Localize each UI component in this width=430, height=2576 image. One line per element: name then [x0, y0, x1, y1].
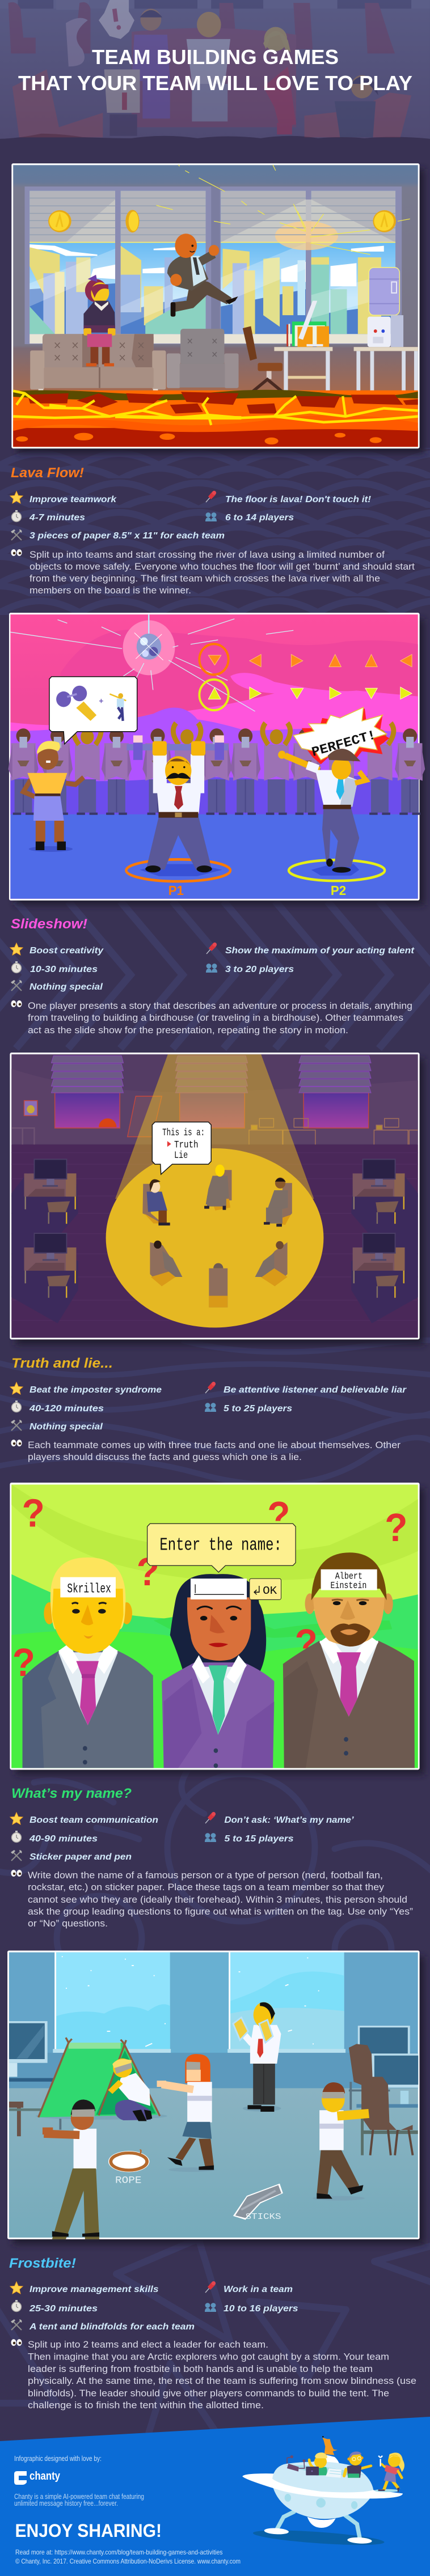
- desks: [24, 1159, 404, 1298]
- text: description: [29, 550, 415, 596]
- background pattern: slideshow chevrons: [0, 901, 430, 1049]
- jumping man: [167, 234, 238, 317]
- chanty description: Chanty is a simple AI-powered team chat featuring: [14, 2492, 144, 2501]
- back desks: [249, 1118, 418, 1144]
- text: description: Split up into 2 teams and elect a leader for each team.: [28, 2340, 268, 2350]
- text: description: leader is suffering from frostbite in both hands and is unable to help the team: [28, 2364, 373, 2374]
- heading: Lava Flow!: Lava Flow!: [11, 465, 84, 481]
- text: duration: 40-120 minutes: [29, 1404, 104, 1414]
- question marks: [12, 1492, 407, 1685]
- panel: lava flow illustration: [11, 163, 420, 448]
- spotlight: [106, 1054, 323, 1327]
- source and license: [15, 2548, 241, 2565]
- speech bubble: truth or lie: This is a:: [162, 1128, 205, 1139]
- heading: What's my name?: What’s my name?: [11, 1786, 132, 1801]
- text: description: Split up into teams and start crossing the river of lava using a limited number of: [29, 550, 385, 560]
- text: players: 3 to 20 players: [225, 965, 294, 974]
- credit line: Infographic designed with love by:: [14, 2454, 102, 2463]
- background pattern: lava section waves: [0, 448, 430, 615]
- panel: frostbite illustration: [7, 1951, 420, 2239]
- icon: eyes: [11, 1870, 22, 1877]
- floor shadows: [11, 1173, 418, 1323]
- background pattern: truth section wavy lines: [0, 1340, 430, 1484]
- text: players: 10 to 16 players: [224, 2304, 298, 2314]
- blindfolded man left: [43, 2099, 99, 2239]
- text: materials: A tent and blindfolds for each team: [29, 2322, 195, 2332]
- question marks: ?: [385, 1506, 407, 1550]
- icon: eyes: [11, 1000, 22, 1007]
- coins: [48, 210, 396, 232]
- text: rule: Show the maximum of your acting talent: [225, 946, 415, 956]
- kneeling teammate: [110, 2059, 152, 2121]
- icon: star: [10, 1382, 23, 1394]
- seated players: [142, 1165, 292, 1308]
- icon: players: [206, 964, 217, 973]
- text: materials: Nothing special: [29, 1422, 103, 1432]
- icon: eyes: [11, 1440, 22, 1446]
- panel shadows: [13, 169, 424, 2244]
- text: rule: Work in a team: [224, 2285, 293, 2294]
- icon: pin: [205, 1382, 216, 1393]
- icon: pin: [205, 1812, 216, 1823]
- right person: Einstein: [330, 1580, 366, 1591]
- right monitors: [356, 2026, 418, 2108]
- source and license: © Chanty, Inc. 2017. Creative Commons Attribution-NoDerivs License. www.chanty.com: [15, 2557, 241, 2565]
- dog: [322, 2436, 338, 2455]
- office chair: [243, 326, 283, 392]
- text: materials: 3 pieces of paper 8.5" x 11" for each team: [29, 531, 225, 541]
- name prompt bubble: [147, 1523, 296, 1572]
- text: description: rockstar, etc.) on sticker paper. Place these tags on a team member so that they: [28, 1882, 385, 1892]
- left person: Skrillex: [67, 1581, 111, 1597]
- text: duration: 40-90 minutes: [29, 1834, 98, 1844]
- heading: Truth and lie...: Truth and lie...: [11, 1356, 113, 1371]
- icon: star: [10, 1813, 23, 1824]
- icon: eyes: [11, 2339, 22, 2346]
- text: rule: The floor is lava! Don't touch it!: [225, 495, 372, 504]
- text: description: challenge is to finish the tent within the allotted time.: [28, 2400, 264, 2411]
- player labels: [168, 883, 346, 898]
- text: description: [28, 2340, 416, 2411]
- player labels: P2: [331, 883, 346, 898]
- text: description: objects to move safely. Everyone who touches the floor will get ‘burnt’ and should start: [29, 562, 415, 572]
- right person: Albert: [335, 1571, 362, 1582]
- icon: pin: [205, 2281, 216, 2293]
- middle person: [162, 1574, 281, 1768]
- sticks: [233, 2184, 283, 2219]
- text: description: Then imagine that you are Arctic explorers who got caught by a storm. Your team: [28, 2352, 389, 2362]
- icon: players: [205, 512, 217, 521]
- icon: pin: [206, 491, 216, 502]
- text: goal: Beat the imposter syndrome: [29, 1385, 162, 1395]
- chanty logo: chanty: [29, 2470, 61, 2482]
- lava floor: [13, 390, 418, 447]
- text: description: from the very beginning. The first team which crosses the lava river with all the: [29, 574, 380, 584]
- text: duration: 25-30 minutes: [29, 2304, 98, 2314]
- robot: [287, 2455, 306, 2472]
- chanty description: unlimited message history free...forever.: [14, 2499, 118, 2507]
- middle person: OK: [263, 1585, 277, 1597]
- footer: [0, 2417, 430, 2576]
- leader with frostbitten hands: [233, 2002, 281, 2112]
- paper stack: [326, 2468, 342, 2478]
- crew member with glasses: [344, 2451, 371, 2478]
- text: description: members on the board is the winner.: [29, 585, 191, 596]
- title: TEAM BUILDING GAMES: [92, 45, 339, 69]
- dancer with perfect burst: PERFECT!: [310, 728, 377, 760]
- title: THAT YOUR TEAM WILL LOVE TO PLAY: [18, 71, 412, 95]
- icon: tools: [11, 1420, 22, 1431]
- icon: pin: [206, 943, 217, 954]
- text: materials: Nothing special: [29, 982, 103, 992]
- icon: eyes: [11, 549, 22, 556]
- icon: players: [205, 2303, 216, 2312]
- text: description: [28, 1870, 413, 1929]
- text: description: ask the group leading questions to figure out what is written on the tag. Use only “Yes”: [28, 1907, 413, 1917]
- speech bubble: truth or lie: Lie: [174, 1151, 188, 1161]
- question marks: ?: [12, 1641, 35, 1685]
- icon: players: [205, 1833, 216, 1842]
- source and license: Read more at: https://www.chanty.com/blog/team-building-games-and-activities: [15, 2548, 222, 2556]
- icon: stopwatch: [11, 510, 22, 521]
- crew member with laptop: [306, 2452, 327, 2475]
- text: players: 5 to 15 players: [225, 1834, 294, 1844]
- panel: what's my name illustration: [10, 1483, 420, 1769]
- background pattern: name section circles: [0, 1771, 430, 1981]
- icon: star: [10, 491, 23, 503]
- right chairs: [349, 2044, 418, 2155]
- question marks: ?: [295, 1622, 318, 1665]
- right person: [283, 1552, 415, 1768]
- icon: stopwatch: [11, 1401, 22, 1412]
- text: rule: Don’t ask: ‘What’s my name’: [225, 1815, 354, 1825]
- text: description: act as the slide show for the presentation, repeating the story in motion.: [28, 1025, 348, 1036]
- text: description: cannot see who they are (ideally their forehead). Within 3 minutes, this person should: [28, 1895, 407, 1905]
- left computer desk: [9, 2021, 67, 2136]
- text: materials: Sticker paper and pen: [29, 1852, 132, 1862]
- icon: stopwatch: [11, 2300, 22, 2311]
- chanty description: [14, 2492, 144, 2507]
- text: duration: 10-30 minutes: [30, 965, 98, 974]
- text: players: 5 to 25 players: [224, 1404, 292, 1414]
- text: description: players should discuss the facts and guess which one is a lie.: [28, 1452, 302, 1462]
- text: goal: Improve management skills: [29, 2285, 159, 2294]
- question marks: ?: [137, 1550, 159, 1594]
- enjoy sharing: ENJOY SHARING!: [15, 2520, 162, 2541]
- rhythm arrows: [199, 644, 412, 710]
- icon: tools: [11, 529, 22, 540]
- icon: stopwatch: [11, 1831, 22, 1842]
- speech bubble: truth or lie: Truth: [174, 1140, 198, 1151]
- desk with monitor: [274, 301, 332, 394]
- speech bubble: [49, 677, 137, 744]
- text: description: physically. At the same time, the rest of the team is suffering from snow blindness (use: [28, 2376, 416, 2386]
- illustration: flying saucer with team: [242, 2436, 404, 2548]
- icon: players: [205, 1403, 216, 1412]
- text: description: or “No” questions.: [28, 1919, 108, 1929]
- text: description: from traveling to building a birdhouse (or traveling in a birdhouse). Other teammates: [28, 1013, 403, 1023]
- text: description: Each teammate comes up with three true facts and one lie about themselves. Other: [28, 1440, 401, 1450]
- player labels: P1: [168, 883, 184, 898]
- speech bubble: truth or lie: [152, 1122, 211, 1174]
- icon: tools: [11, 980, 22, 991]
- heading: Slideshow!: Slideshow!: [11, 916, 87, 932]
- sticks label: STICKS: [246, 2212, 281, 2222]
- windows and blinds: [11, 1056, 371, 1144]
- rope: [108, 2150, 149, 2172]
- rope label: ROPE: [115, 2175, 141, 2187]
- text: description: [28, 1001, 412, 1036]
- title: [18, 45, 412, 95]
- text: description: Write down the name of a famous person or a type of person (nerd, football fan,: [28, 1870, 383, 1881]
- chanty logo: [14, 2470, 61, 2485]
- text: rule: Be attentive listener and believable liar: [224, 1385, 407, 1395]
- icon: stopwatch: [11, 961, 22, 973]
- woman on sofa: [83, 275, 116, 366]
- background pattern: frostbite triangles: [0, 2239, 430, 2437]
- left person: [23, 1558, 154, 1768]
- text: goal: Boost creativity: [29, 946, 104, 956]
- text: goal: Boost team communication: [29, 1815, 158, 1825]
- icon: tools: [11, 2319, 22, 2330]
- text: players: 6 to 14 players: [225, 513, 294, 523]
- window: [25, 165, 410, 344]
- dancer with perfect burst: [278, 707, 389, 881]
- question marks: ?: [267, 1494, 290, 1538]
- icon: star: [10, 2282, 23, 2294]
- text: description: blindfolds). The leader should give other players commands to build the tent. The: [28, 2388, 389, 2399]
- header background scene: [0, 0, 430, 139]
- heading: Frostbite!: Frostbite!: [9, 2256, 76, 2271]
- sofa: [30, 334, 166, 395]
- crew member with wrench: [374, 2452, 404, 2493]
- blindfolded woman: [157, 2054, 215, 2172]
- windows: [53, 1953, 345, 2053]
- tent: [36, 2038, 167, 2120]
- blindfolded man right: [313, 2082, 369, 2201]
- text: description: One player presents a story that describes an adventure or process in details, anything: [28, 1001, 412, 1011]
- icon: tools: [11, 1850, 22, 1861]
- crowd: [9, 723, 425, 815]
- text: duration: 4-7 minutes: [29, 513, 85, 523]
- header banner: [0, 0, 430, 139]
- text: goal: Improve teamwork: [29, 495, 117, 504]
- table with water cooler: [354, 268, 418, 394]
- text: description: [28, 1440, 401, 1462]
- presenter woman: [23, 741, 83, 852]
- question marks: ?: [22, 1492, 45, 1535]
- armchair: [167, 329, 239, 388]
- weightlifter: [126, 735, 230, 881]
- panel: truth and lie illustration: [10, 1053, 420, 1339]
- name prompt bubble: Enter the name:: [159, 1535, 282, 1556]
- disco ball: [10, 614, 293, 711]
- panel: slideshow illustration: [9, 613, 425, 901]
- icon: star: [10, 943, 23, 955]
